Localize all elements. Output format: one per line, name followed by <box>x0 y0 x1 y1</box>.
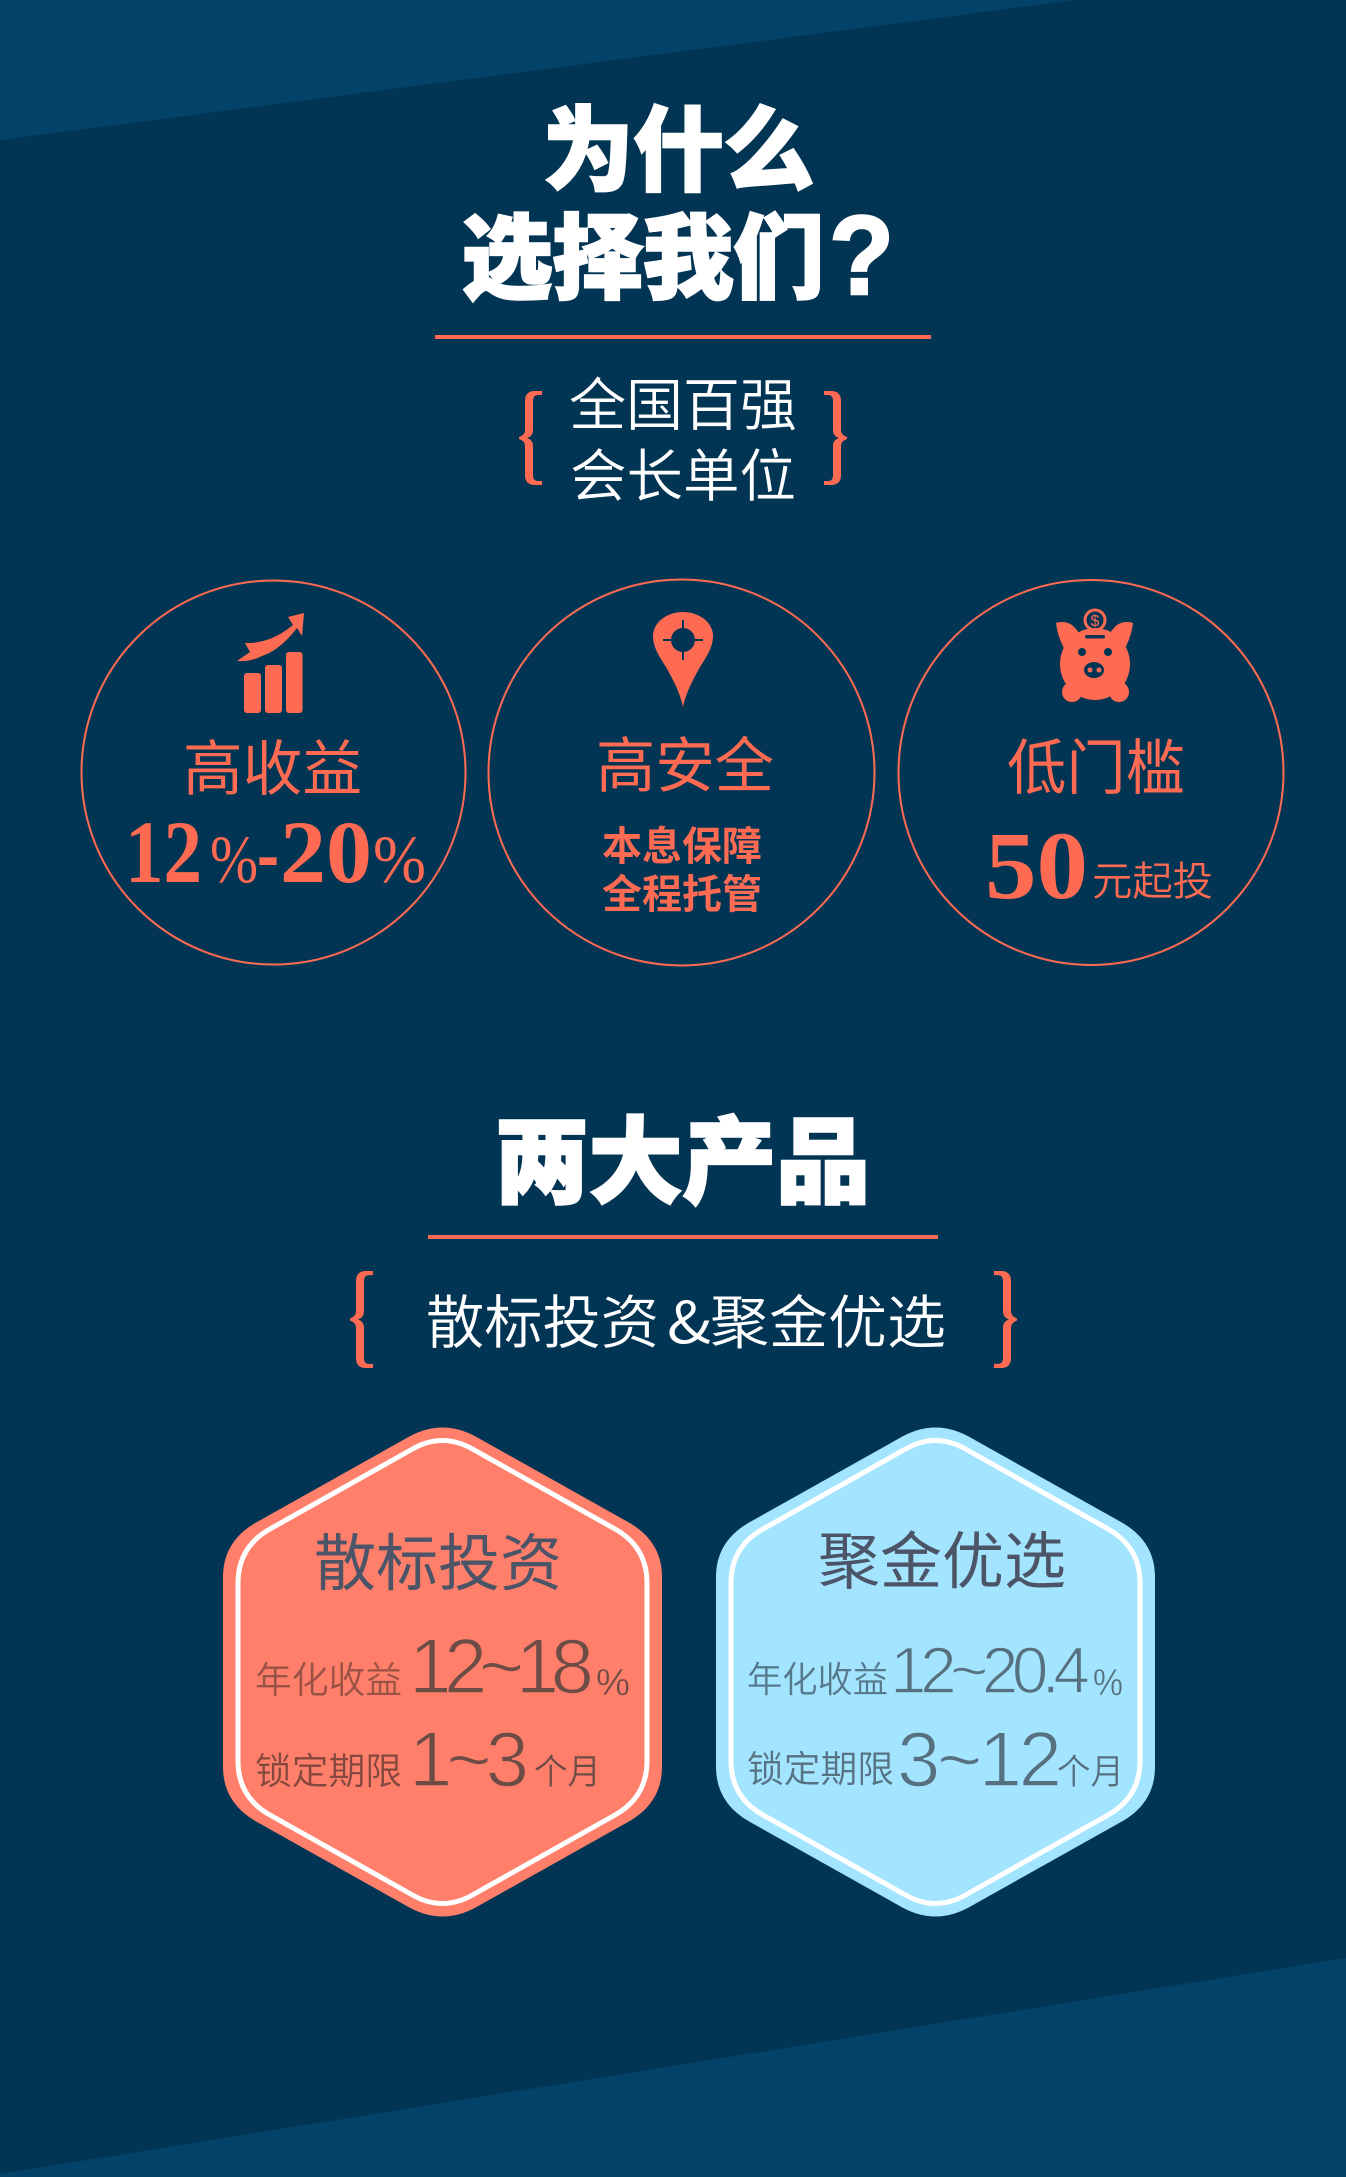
title: why choose us: 为什么 <box>543 77 814 210</box>
subtitle text: 聚金优选 <box>710 1276 946 1360</box>
product name: 散标投资 <box>314 1513 562 1603</box>
icon: piggy bank with coin: $ <box>1091 613 1100 630</box>
title: why choose us: ? <box>829 193 894 318</box>
figure: 12%-20% <box>125 804 426 902</box>
annual yield row: % <box>1093 1662 1123 1704</box>
lock-up period row <box>255 1715 601 1803</box>
figure: 12%-20%: % <box>210 821 258 897</box>
safety details: 全程托管 <box>602 862 762 920</box>
title: why choose us <box>462 77 894 318</box>
lock-up period row: 3~12 <box>897 1715 1062 1803</box>
panel: curated fund hexagon <box>716 1428 1155 1916</box>
subtitle text <box>426 1276 946 1360</box>
title: why choose us: 选择我们 <box>462 185 824 318</box>
heading: two products: 两大产品 <box>495 1087 870 1223</box>
figure: 12%-20%: % <box>373 821 426 897</box>
panel: p2p investment hexagon <box>223 1428 662 1916</box>
figure: 12%-20%: 12 <box>125 804 202 902</box>
icon: piggy bank with coin <box>1056 610 1133 702</box>
panel: low threshold <box>898 580 1284 965</box>
right brace <box>994 1271 1017 1368</box>
annual yield row: 年化收益 <box>747 1651 888 1703</box>
icon: map pin <box>653 612 713 707</box>
label: low threshold: 低门槛 <box>1007 720 1185 807</box>
figure: 12%-20%: 20 <box>280 804 372 902</box>
lock-up period row: 锁定期限 <box>747 1739 894 1793</box>
product name: 聚金优选 <box>818 1511 1066 1601</box>
icon: rising bars with arrow <box>237 613 304 713</box>
label: high safety: 高安全 <box>596 718 774 805</box>
subtitle text: 会长单位 <box>570 431 796 513</box>
annual yield row <box>255 1622 630 1710</box>
figure: 50 yuan minimum <box>985 812 1213 919</box>
annual yield row: % <box>596 1662 630 1704</box>
lock-up period row: 1~3 <box>409 1715 529 1803</box>
lock-up period row: 个月 <box>534 1744 601 1795</box>
annual yield row: 年化收益 <box>255 1650 402 1704</box>
subtitle text: 全国百强 <box>569 360 797 442</box>
lock-up period row: 锁定期限 <box>255 1741 402 1795</box>
subtitle: product names <box>350 1271 1017 1368</box>
left brace <box>350 1271 373 1368</box>
left brace <box>519 391 542 485</box>
panel: high yield <box>82 580 466 964</box>
lock-up period row <box>747 1715 1124 1803</box>
subtitle text <box>569 360 797 513</box>
figure: 50 yuan minimum: 50 <box>985 812 1088 919</box>
safety details <box>602 814 762 920</box>
figure: 50 yuan minimum: 元起投 <box>1092 849 1213 907</box>
figure: 12%-20%: - <box>257 804 279 902</box>
subtitle text: 散标投资 <box>426 1276 659 1360</box>
right brace <box>824 391 847 485</box>
subtitle: top 100 president unit <box>519 360 847 513</box>
annual yield row <box>747 1633 1123 1707</box>
lock-up period row: 个月 <box>1057 1744 1124 1795</box>
subtitle text: & <box>667 1276 711 1360</box>
annual yield row: 12~18 <box>409 1622 594 1710</box>
safety details: 本息保障 <box>602 814 762 872</box>
annual yield row: 12~20.4 <box>890 1633 1090 1707</box>
panel: high safety <box>488 580 874 966</box>
label: high yield: 高收益 <box>183 721 362 808</box>
